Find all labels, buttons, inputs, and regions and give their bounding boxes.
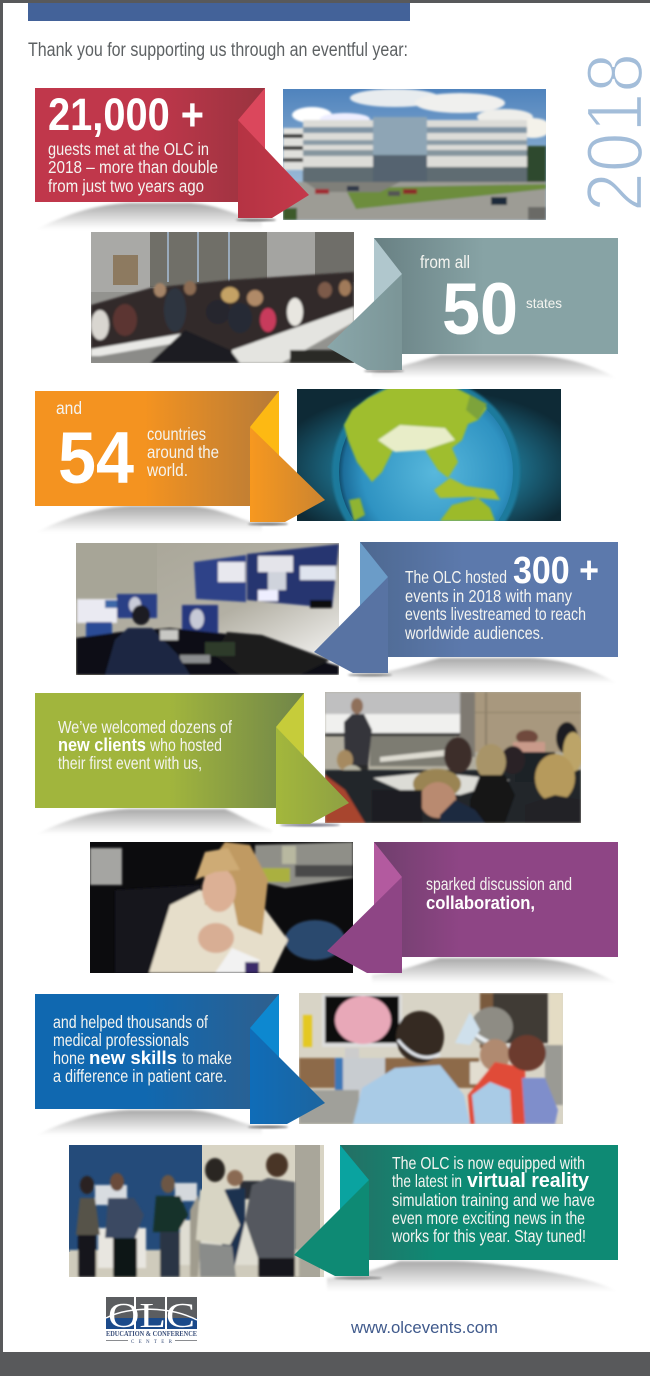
text: guests: from just two years ago [48,176,204,196]
text: events hosted: worldwide audiences. [404,623,544,643]
text: virtual reality: simulation training and we have [392,1190,595,1210]
text: new skills: a difference in patient care. [53,1066,227,1086]
photo: woman in discussion [90,842,353,973]
photo: surgical training [299,993,563,1124]
logo: OLC: CENTER [131,1340,173,1345]
logo: OLC: EDUCATION & CONFERENCE [106,1330,197,1338]
text: guests: 2018 – more than double [48,157,218,177]
text: new clients: We’ve welcomed dozens of [58,717,232,737]
text: virtual reality: the latest in [392,1171,462,1191]
text: new skills [53,1012,232,1086]
text: virtual reality [391,1153,595,1246]
text: events hosted: The OLC hosted [405,567,507,587]
text: new clients: who hosted [149,735,222,755]
text: events hosted [404,550,599,643]
text: countries around the world: countries [147,424,206,444]
stat: 54: 54 [58,418,134,499]
top banner bar [28,3,410,21]
text: new clients [58,717,232,773]
panel: events [76,542,618,684]
photo: globe [297,389,561,521]
text: guests: guests met at the OLC in [48,139,209,159]
text: events hosted: events in 2018 with many [405,586,572,606]
panel: new skills [35,993,563,1136]
text: new skills: and helped thousands of [53,1012,208,1032]
photo: classroom with speaker [325,692,581,823]
text: virtual reality: works for this year. Stay tuned! [391,1226,586,1246]
text: new skills: new skills [89,1047,177,1068]
text: new skills: to make [182,1048,232,1068]
text: collaboration [426,874,572,913]
stat: 300+: 300 + [513,550,599,592]
panel: collaboration [90,842,618,984]
text: collaboration: sparked discussion and [426,874,572,894]
website url: www.olcevents.com [350,1318,498,1337]
panel: guests [35,88,551,230]
stat: 50: 50 [442,269,518,350]
logo: OLC: OLC [108,1296,195,1335]
panel: new clients [35,692,583,835]
text: countries around the world [146,424,219,480]
text: countries around the world: world. [146,460,188,480]
text: events hosted: events livestreamed to reach [405,604,586,624]
text: new skills: hone [53,1048,85,1068]
text: and: and [56,398,82,418]
text: from all: from all [420,252,470,272]
logo: OLC [106,1296,197,1345]
heading: Thank you for supporting us through an eventful year: [28,40,408,61]
text: countries around the world: around the [147,442,219,462]
photo: VR simulation training [69,1145,324,1277]
photo: conference center building [283,89,546,220]
photo: control room [76,543,339,675]
text: new clients: their first event with us, [58,753,202,773]
text: guests [48,139,218,196]
text: new skills: medical professionals [53,1030,189,1050]
text: collaboration: collaboration, [426,892,535,913]
stat: 21,000+: 21,000 + [48,89,204,140]
panel: states [91,232,618,379]
text: virtual reality: The OLC is now equipped with [392,1153,585,1173]
panel: virtual reality [69,1145,618,1292]
text: virtual reality: even more exciting news in the [392,1208,585,1228]
panel: countries [35,378,561,566]
text: virtual reality: virtual reality [467,1170,590,1192]
photo: seated audience [91,232,354,363]
text: states: states [526,295,562,311]
text: new clients: new clients [58,734,146,755]
